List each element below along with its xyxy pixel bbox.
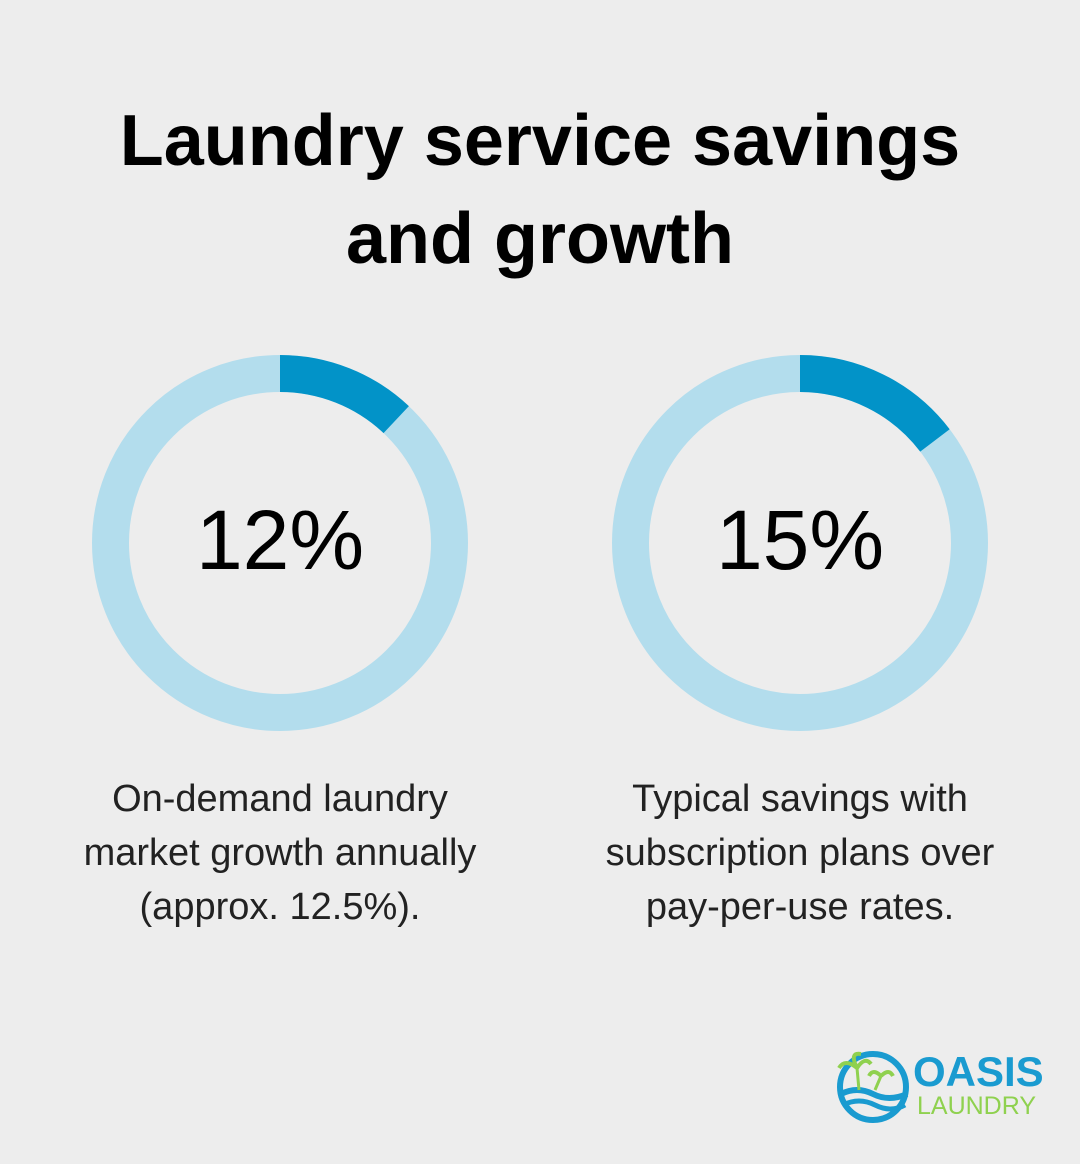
logo: LAUNDRY [917,1092,1036,1120]
caption: left [84,778,476,928]
value: 15%: 15% [716,493,884,587]
donut: 15% [612,355,988,731]
caption: right: Typical savings with [632,778,968,820]
title: Laundry service savings [120,101,960,181]
caption: left: (approx. 12.5%). [140,886,420,928]
caption: left: On-demand laundry [112,778,448,820]
donut: 12% [92,355,468,731]
logo [837,1048,1044,1123]
title [120,101,960,279]
title: and growth [346,199,734,279]
logo: OASIS [913,1048,1044,1095]
caption: right: pay-per-use rates. [646,886,954,928]
caption: left: market growth annually [84,832,476,874]
caption: right [606,778,994,928]
caption: right: subscription plans over [606,832,994,874]
value: 12%: 12% [196,493,364,587]
